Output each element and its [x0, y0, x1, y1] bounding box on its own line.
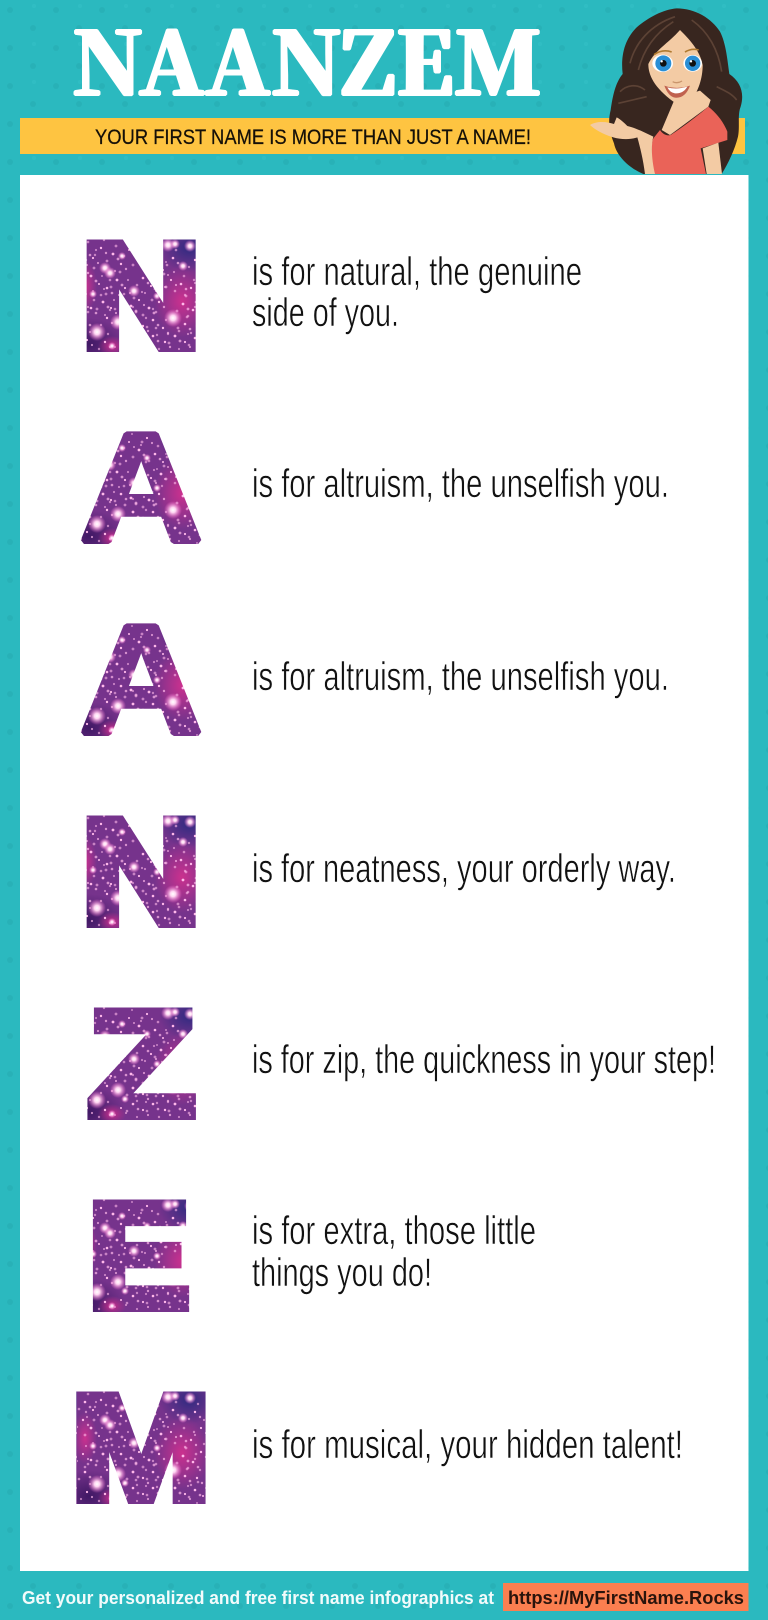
- row: letter A second: [80, 593, 669, 766]
- letter A: A: [80, 401, 203, 574]
- text: extra: [252, 1209, 536, 1295]
- row: letter M: [71, 1364, 683, 1531]
- row: letter E: [88, 1172, 536, 1339]
- text: natural: [252, 250, 582, 335]
- text: extra: is for extra, those little: [252, 1209, 536, 1253]
- subtitle text: YOUR FIRST NAME IS MORE THAN JUST A NAME!: [95, 126, 531, 149]
- footer link badge: [503, 1583, 748, 1611]
- letter A: A: [80, 593, 203, 766]
- letter N: N: [81, 212, 201, 379]
- text: natural: side of you.: [252, 291, 399, 335]
- letter E: E: [88, 1172, 190, 1339]
- row: letter N: [81, 212, 582, 379]
- footer link badge: https://MyFirstName.Rocks: [508, 1588, 744, 1608]
- icon: cartoon woman: [590, 8, 742, 174]
- footer text: Get your personalized and free first name infographics at: [22, 1588, 494, 1608]
- text: natural: is for natural, the genuine: [252, 250, 582, 294]
- row: letter Z: [88, 980, 716, 1147]
- footer: [22, 1583, 748, 1611]
- row: letter N second: [81, 788, 676, 955]
- subtitle banner: [20, 118, 745, 154]
- text: extra: things you do!: [252, 1251, 432, 1295]
- letter N: N: [81, 788, 201, 955]
- letter M: M: [71, 1364, 211, 1531]
- letter Z: Z: [88, 980, 195, 1147]
- row: letter A: [80, 401, 669, 574]
